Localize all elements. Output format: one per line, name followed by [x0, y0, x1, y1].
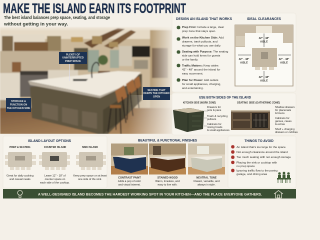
- callout: seating: [143, 87, 170, 100]
- avoid list: Ignoring traffic flow to the pantry,: [236, 168, 278, 172]
- layout: prep and seating: PREP & SEATING: [10, 146, 30, 149]
- floor plan diagram: [235, 25, 293, 86]
- page background: [0, 0, 300, 200]
- design tips list: and entertaining.: [182, 86, 204, 90]
- seating side features: for placemats: [275, 108, 292, 112]
- callout: storage: FUNCTION ON: [10, 104, 27, 106]
- kitchen side label: KITCHEN SIDE (WORK ZONE): [183, 100, 216, 104]
- layout: counter island: counter space on: [45, 177, 66, 181]
- avoid list: [231, 145, 291, 176]
- kitchen side features: Trash & recycling: [207, 114, 228, 118]
- layout: prep and seating: and casual meals: [10, 177, 31, 181]
- kitchen side features: pots & pans: [207, 108, 222, 112]
- finish: stained wood: STAINED WOOD: [157, 175, 178, 179]
- heading: layout options: ISLAND LAYOUT OPTIONS: [28, 139, 71, 143]
- design tips list: easy movement.: [182, 72, 203, 76]
- kitchen side features: Drawers for: [207, 105, 221, 109]
- finish: stained wood: [149, 144, 186, 186]
- kitchen photo: [0, 25, 180, 136]
- design tips list: Work on the Kitchen Side: Add: [182, 36, 224, 40]
- floor plan diagram: AISLE: [260, 40, 268, 44]
- finish: stained wood: easy to live with.: [158, 182, 178, 186]
- design tips list: Plan for Power: Add outlets: [182, 78, 219, 82]
- callout: storage: STORAGE &: [11, 100, 26, 103]
- layout: prep and seating: [5, 146, 36, 181]
- design tips list: side can hold items for guests: [182, 54, 221, 58]
- seating side label: SEATING SIDE (GATHERING ZONE): [237, 100, 280, 104]
- seating side cabinet: [231, 110, 270, 130]
- floor plan diagram: 42" - 48": [239, 57, 250, 61]
- heading: use both sides: USE BOTH SIDES OF THE ISLAND: [199, 96, 251, 100]
- subtitle: without getting in your way.: [3, 21, 69, 27]
- layout: prep and seating: Great for daily cooking: [7, 174, 34, 178]
- layout: counter island: COUNTER ISLAND: [44, 146, 66, 149]
- title: MAKE THE ISLAND EARN ITS FOOTPRINT: [3, 1, 187, 16]
- kitchen side features: mixing bowls: [207, 125, 223, 129]
- callout: seating: OPEN: [153, 96, 160, 98]
- seating side features: Cabinets for: [275, 116, 290, 120]
- icon: house: [274, 190, 283, 198]
- panel: use both sides: [172, 93, 298, 135]
- finish: contrast paint: Adds a pop of color: [118, 179, 141, 183]
- seating side features: Shallow drawers: [275, 105, 295, 109]
- panel: design and clearances: [172, 13, 296, 92]
- layout: counter island: each side of the cooktop.: [40, 180, 70, 184]
- layout: sink island: one side of the sink.: [78, 177, 102, 181]
- seating side features: [275, 105, 298, 134]
- seating side features: & extras: [275, 122, 286, 126]
- heading: finishes: BEAUTIFUL & FUNCTIONAL FINISHES: [138, 138, 197, 142]
- avoid list: no prep space: [236, 164, 255, 168]
- design tips list: storage for what you use daily.: [182, 44, 221, 48]
- callout: prep space: PLENTY OF: [66, 54, 80, 57]
- subtitle: The best island balances prep space, seating, and storage: [4, 15, 110, 21]
- design tips list: drawers, trash pullouts, and: [182, 40, 218, 44]
- icon: light bulb: [18, 190, 22, 198]
- floor plan diagram: 42" - 48": [259, 75, 270, 79]
- kitchen side features: Cabinets for: [207, 122, 222, 126]
- design tips list: prep zone that stays open.: [182, 29, 216, 33]
- seating side features: Shelf + charging: [275, 127, 295, 131]
- finish: contrast paint: CONTRAST PAINT: [118, 175, 141, 179]
- layout: sink island: Keep prep space on at least: [73, 174, 107, 178]
- avoid list: Not enough clearance around the island: [236, 150, 288, 154]
- callout: prep space: [59, 52, 87, 81]
- avoid list: An island that's too large for the space: [236, 145, 286, 149]
- callout: seating: KEEPS THE KITCHEN: [144, 92, 170, 95]
- finish: neutral tone: [188, 144, 225, 186]
- footer banner: [3, 189, 296, 198]
- finish: neutral tone: always in style.: [197, 182, 216, 186]
- design tips list: for small appliances, charging,: [182, 82, 221, 86]
- heading: things to avoid: THINGS TO AVOID: [244, 139, 274, 143]
- panel: finishes: [111, 138, 225, 186]
- icon: people at island: [277, 172, 291, 183]
- avoid list: Too much seating with not enough storage: [236, 155, 291, 159]
- floor plan diagram: 42" - 48": [259, 36, 270, 40]
- callout: storage: THE KITCHEN SIDE: [7, 107, 30, 110]
- seating side features: & linens: [275, 111, 285, 115]
- finish: contrast paint: [111, 144, 148, 186]
- layout: counter island: Leave 12" - 18" of: [44, 174, 66, 178]
- callout: storage: [6, 98, 31, 112]
- callout: prep space: UNINTERRUPTED: [62, 57, 84, 60]
- layout: counter island: [39, 146, 70, 184]
- panel: island layout options: [3, 136, 107, 188]
- design tips list: Seating with Purpose: The seating: [182, 50, 229, 54]
- finish: neutral tone: NEUTRAL TONE: [196, 175, 217, 179]
- seating side features: games, cases: [275, 120, 292, 123]
- kitchen side features: & small appliances: [207, 128, 230, 132]
- callout: prep space: PREP SPACE: [65, 60, 81, 63]
- layout: sink island: SINK ISLAND: [82, 146, 98, 149]
- callout: seating: SEATING THAT: [147, 89, 166, 92]
- design tips list: or the family.: [182, 58, 199, 62]
- design tips list: 42" - 48" around the island for: [182, 68, 220, 72]
- design tips list: [177, 25, 229, 90]
- finish: contrast paint: and visual interest.: [118, 182, 141, 186]
- avoid list: garage, and dining area: [236, 172, 267, 176]
- avoid list: Placing the sink or cooktop with: [236, 160, 277, 164]
- heading: design an island: DESIGN AN ISLAND THAT WORKS: [176, 16, 232, 21]
- finish: stained wood: Warm, timeless, and: [155, 179, 180, 183]
- layout: sink island: [73, 146, 107, 181]
- floor plan diagram: AISLE: [280, 60, 288, 64]
- kitchen side cabinet: [173, 108, 207, 132]
- kitchen side features: pullouts: [207, 117, 217, 121]
- heading: ideal clearances: IDEAL CLEARANCES: [247, 16, 281, 21]
- kitchen side features: [207, 105, 230, 132]
- floor plan diagram: AISLE: [260, 78, 268, 82]
- seating side features: drawers or cubbies: [275, 130, 298, 134]
- panel: things to avoid: [228, 136, 296, 188]
- floor plan diagram: AISLE: [240, 60, 248, 64]
- floor plan diagram: 42" - 48": [279, 57, 290, 61]
- subtitle: [3, 15, 110, 27]
- design tips list: Prep First: Include a large, clear: [182, 25, 224, 29]
- design tips list: Traffic Matters: Keep aisles: [182, 64, 219, 68]
- footer text: A WELL-DESIGNED ISLAND BECOMES THE HARDEST WORKING SPOT IN YOUR KITCHEN—AND THE PLACE EVERYONE GATHERS.: [38, 192, 262, 196]
- finish: neutral tone: Classic, versatile, and: [193, 179, 220, 183]
